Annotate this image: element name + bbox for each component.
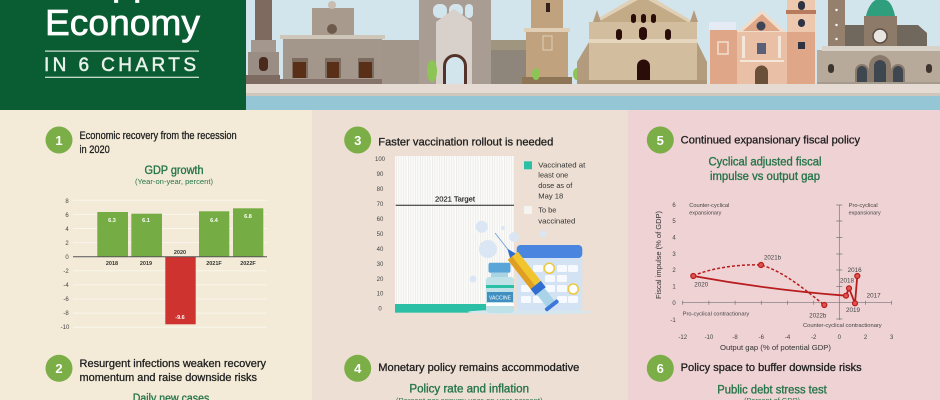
scatter chart: fiscal impulse vs output gap: 0	[838, 335, 842, 341]
scatter chart: fiscal impulse vs output gap: 4	[672, 236, 676, 242]
building: stone tower with arch	[419, 0, 491, 84]
scatter chart: fiscal impulse vs output gap: 3	[672, 252, 676, 258]
panel 1: economic recovery	[46, 126, 267, 331]
icon: vaccine vial, syringe and calendar	[468, 221, 592, 314]
bar chart: GDP growth: -6	[63, 297, 69, 303]
heading 3: Faster vaccination rollout is needed	[378, 137, 553, 149]
scatter chart: fiscal impulse vs output gap: 3	[890, 335, 894, 341]
scatter chart: fiscal impulse vs output gap: 1	[672, 284, 676, 290]
bar chart: GDP growth: -8	[63, 311, 69, 317]
heading 2: Resurgent infections weaken recovery	[80, 358, 267, 370]
bar chart: GDP growth: -2	[63, 269, 69, 275]
scatter chart: fiscal impulse vs output gap: 2021b	[764, 255, 782, 261]
scatter chart: fiscal impulse vs output gap: 2	[672, 268, 676, 274]
header title block: Economy	[45, 2, 200, 43]
header skyline illustration	[246, 0, 940, 110]
badge 2	[46, 355, 72, 382]
scatter chart: fiscal impulse vs output gap: -8	[732, 335, 738, 341]
scatter chart: fiscal impulse vs output gap: Counter-cyclical	[689, 203, 729, 209]
chart title: GDP growth: GDP growth	[144, 165, 204, 177]
scatter chart: fiscal impulse vs output gap: 6	[672, 203, 676, 209]
vaccination progress bar chart: 40	[377, 247, 384, 253]
bar chart: GDP growth: 8	[65, 199, 69, 205]
vaccination progress bar chart: 20	[377, 277, 384, 283]
heading 1: Economic recovery from the recession	[80, 130, 267, 142]
badge 6: 6	[657, 361, 664, 376]
panel 5: fiscal policy	[647, 126, 894, 352]
bar chart: GDP growth: 2019	[140, 261, 152, 267]
legend: dose as of	[538, 181, 573, 190]
badge 4: 4	[354, 361, 362, 376]
chart title: public debt stress test: Public debt stress test	[717, 384, 827, 396]
heading 2	[80, 358, 267, 384]
bar chart: GDP growth: 2020	[174, 250, 186, 256]
badge 2: 2	[55, 361, 63, 376]
chart title: policy rate and inflation: Policy rate and inflation	[409, 384, 529, 396]
bar chart: GDP growth: 6.8	[244, 214, 252, 220]
vaccination progress bar chart: 2021 Target	[435, 195, 475, 204]
scatter chart: fiscal impulse vs output gap: 0	[672, 301, 676, 307]
bar chart: GDP growth: 2	[65, 241, 69, 247]
scatter chart: fiscal impulse vs output gap: -6	[759, 335, 765, 341]
heading 5: Continued expansionary fiscal policy	[681, 134, 860, 146]
scatter chart: fiscal impulse vs output gap: -1	[670, 318, 676, 324]
scatter chart: fiscal impulse vs output gap: -10	[705, 335, 714, 341]
bar chart: GDP growth: -4	[63, 283, 69, 289]
building: green-domed cathedral	[817, 0, 940, 84]
vaccination progress bar chart: 90	[377, 172, 384, 178]
scatter chart: fiscal impulse vs output gap: Fiscal impulse (% of GDP)	[654, 211, 663, 299]
bar chart: GDP growth: 2021F	[206, 261, 222, 267]
badge 1: 1	[55, 133, 63, 148]
bar chart: GDP growth: 6.4	[210, 218, 219, 224]
scatter chart: fiscal impulse vs output gap: 2	[864, 335, 868, 341]
header title block: IN 6 CHARTS	[44, 55, 196, 76]
legend: May 18	[538, 191, 563, 200]
scatter chart: fiscal impulse vs output gap	[654, 203, 894, 352]
scatter chart: fiscal impulse vs output gap: 2019	[846, 308, 861, 314]
scatter chart: fiscal impulse vs output gap: Pro-cyclical	[849, 203, 878, 209]
scatter chart: fiscal impulse vs output gap: 2018	[840, 279, 855, 285]
bar chart: GDP growth: 6.3	[108, 218, 116, 224]
bar chart: GDP growth: 6	[65, 213, 69, 219]
building: tan tower	[491, 0, 581, 84]
scatter chart: fiscal impulse vs output gap: -4	[785, 335, 791, 341]
scatter chart: fiscal impulse vs output gap: 2017	[867, 294, 881, 300]
legend: Vaccinated at	[538, 160, 586, 169]
vaccination progress bar chart: 80	[377, 187, 384, 193]
scatter chart: fiscal impulse vs output gap: 2022b	[809, 313, 827, 319]
header title block	[0, 0, 246, 110]
badge 3	[344, 126, 371, 154]
scatter chart: fiscal impulse vs output gap: Pro-cyclical contractionary	[683, 311, 750, 317]
bar chart: GDP growth: -9.6	[175, 315, 185, 321]
vaccination progress bar chart: 60	[377, 217, 384, 223]
chart subtitle: (Year-on-year, percent)	[135, 179, 213, 186]
bar chart: GDP growth	[61, 199, 267, 331]
panel 3: vaccination	[344, 126, 592, 314]
chart title: cyclical adjusted fiscal impulse: Cyclical adjusted fiscal	[708, 157, 822, 169]
chart title: cyclical adjusted fiscal impulse: impulse vs output gap	[710, 171, 820, 183]
vaccination progress bar chart	[375, 156, 514, 313]
building: peach church	[709, 0, 816, 84]
panel 4: monetary policy	[344, 355, 579, 400]
scatter chart: fiscal impulse vs output gap: expansionary	[849, 211, 881, 217]
bar chart: GDP growth: 2018	[106, 261, 118, 267]
legend	[524, 160, 586, 226]
bar chart: GDP growth: 2022F	[240, 261, 256, 267]
scatter chart: fiscal impulse vs output gap: -12	[678, 335, 688, 341]
vaccination progress bar chart: 0	[378, 306, 382, 312]
vaccination progress bar chart: 10	[377, 292, 384, 298]
heading 1: in 2020	[80, 144, 110, 156]
badge 5: 5	[657, 133, 664, 148]
bar chart: GDP growth: 4	[65, 227, 69, 233]
badge 5	[647, 126, 674, 154]
bar chart: GDP growth: 0	[65, 255, 69, 261]
badge 6	[647, 355, 674, 382]
badge 4	[344, 355, 371, 382]
bar chart: GDP growth: 6.1	[142, 218, 150, 224]
vaccination progress bar chart: 30	[377, 262, 384, 268]
icon: vaccine vial, syringe and calendar: VACCINE	[489, 296, 511, 302]
heading 6: Policy space to buffer downside risks	[681, 362, 862, 374]
panel backgrounds	[0, 110, 940, 400]
heading 4: Monetary policy remains accommodative	[378, 362, 579, 374]
scatter chart: fiscal impulse vs output gap: Counter-cyclical contractionary	[803, 323, 882, 329]
building: bell tower and cathedral	[246, 0, 420, 84]
panel 6: policy space	[647, 355, 862, 400]
scatter chart: fiscal impulse vs output gap: -2	[811, 335, 817, 341]
vaccination progress bar chart: 50	[377, 232, 384, 238]
chart title: cyclical adjusted fiscal impulse	[708, 157, 822, 183]
legend: To be	[538, 206, 556, 215]
scatter chart: fiscal impulse vs output gap: 2020	[694, 283, 709, 289]
vaccination progress bar chart: 100	[375, 157, 386, 163]
heading 2: momentum and raise downside risks	[80, 372, 257, 384]
badge 3: 3	[354, 133, 361, 148]
legend: vaccinated	[538, 217, 575, 226]
bar chart: GDP growth: -10	[61, 325, 70, 331]
vaccination progress bar chart: 70	[377, 202, 384, 208]
legend: least one	[538, 171, 568, 180]
panel 2: resurgent infections	[46, 355, 267, 400]
badge 1	[46, 126, 72, 154]
scatter chart: fiscal impulse vs output gap: 2016	[848, 268, 862, 274]
scatter chart: fiscal impulse vs output gap: 5	[672, 219, 676, 225]
building: baroque church	[577, 0, 707, 84]
scatter chart: fiscal impulse vs output gap: Output gap (% of potential GDP)	[720, 343, 832, 352]
scatter chart: fiscal impulse vs output gap: expansionary	[689, 211, 722, 217]
